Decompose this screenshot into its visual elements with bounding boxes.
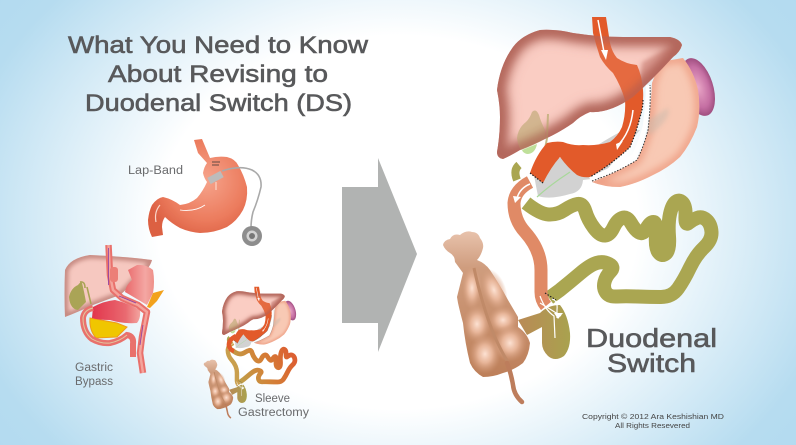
illustration: Lap-Band stomach — [148, 139, 262, 246]
gallbladder — [517, 111, 548, 175]
arrow — [342, 158, 417, 352]
flow arrows — [517, 20, 633, 198]
label: Sleeve Gastrectomy — [238, 393, 309, 419]
title: About Revising to — [108, 61, 328, 88]
appendix — [507, 363, 522, 402]
label: Duodenal Switch: Switch — [607, 348, 696, 378]
copyright — [582, 412, 725, 430]
title: Duodenal Switch (DS) — [85, 90, 352, 117]
white gap — [590, 85, 648, 179]
copyright: Copyright © 2012 Ara Keshishian MD — [582, 412, 725, 421]
staple line on sleeve — [530, 100, 643, 183]
label: Gastric Bypass — [75, 362, 113, 388]
stomach remnant — [592, 58, 699, 187]
arrowheads — [513, 50, 623, 203]
title — [68, 32, 369, 117]
copyright: All Rights Resevered — [615, 421, 690, 430]
title: What You Need to Know — [68, 32, 369, 59]
green duct — [537, 172, 570, 197]
gray pancreas — [533, 130, 640, 198]
spleen — [674, 54, 722, 120]
mini orange loop — [229, 336, 236, 351]
illustration: duodenal switch — [443, 10, 722, 402]
label: Lap-Band: Lap-Band — [128, 165, 183, 177]
label: Sleeve Gastrectomy: Sleeve — [255, 393, 290, 405]
alimentary limb — [526, 201, 712, 298]
label: Duodenal Switch — [586, 323, 717, 378]
flow arrows in ileum — [540, 296, 561, 338]
olive duodenal stump — [515, 165, 519, 180]
label: Duodenal Switch: Duodenal — [586, 323, 717, 353]
sleeve stomach — [530, 17, 643, 183]
biliary limb — [514, 182, 546, 306]
colon — [443, 231, 530, 377]
label: Sleeve Gastrectomy: Gastrectomy — [238, 407, 309, 419]
illustration: sleeve gastrectomy — [204, 284, 298, 418]
label: Gastric Bypass: Bypass — [75, 376, 113, 388]
common channel — [518, 305, 570, 359]
staple line on remnant — [592, 85, 650, 181]
colon haustra — [462, 265, 527, 374]
liver — [497, 30, 690, 159]
label: Gastric Bypass: Gastric — [75, 362, 113, 374]
liver overlay on sleeve — [480, 10, 700, 170]
illustration: gastric bypass — [64, 245, 164, 373]
